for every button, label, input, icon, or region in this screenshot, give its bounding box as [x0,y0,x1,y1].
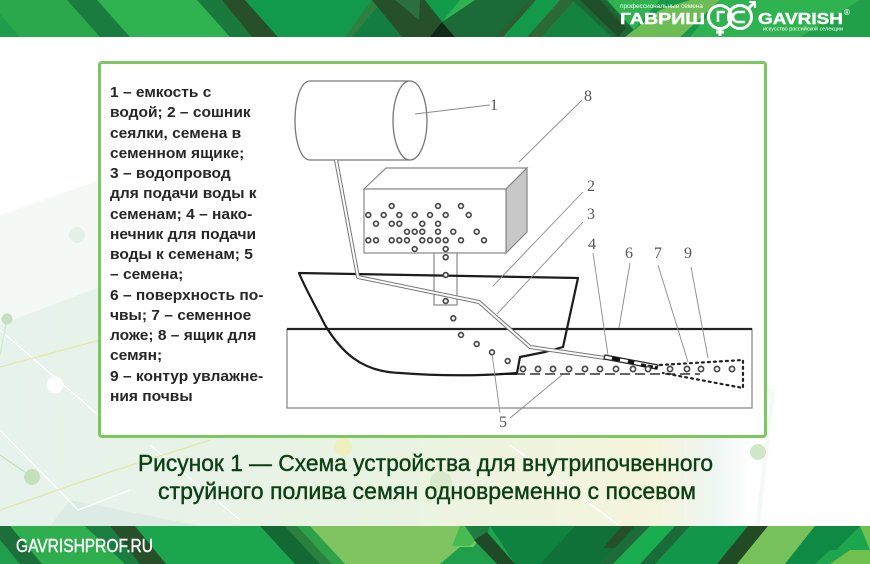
soil block [287,329,752,408]
panel legend text: ния почвы [110,388,193,405]
panel legend text: ложе; 8 – ящик для [110,327,256,344]
panel legend text: семенном ящике; [110,145,244,162]
panel legend text: сеялки, семена в [110,124,241,142]
footer url: GAVRISHPROF.RU [16,536,153,556]
panel legend text: 1 – емкость с [110,84,211,101]
bottom banner [0,526,870,564]
number labels: 6 [625,245,633,262]
panel legend text: нечник для подачи [110,226,256,243]
panel legend text: 6 – поверхность по- [110,286,263,304]
panel legend text [110,84,263,405]
number labels: 1 [490,97,498,114]
panel legend text: для подачи воды к [110,185,257,202]
coulter hull [299,273,578,375]
number labels: 4 [588,236,596,253]
panel legend text: семян; [110,347,162,364]
panel: diagram frame [98,61,767,438]
seed box [364,168,527,305]
panel legend text: семенам; 4 – нако- [110,206,252,222]
number labels: 9 [684,245,692,262]
seeds on bed [520,366,735,372]
number labels: 2 [587,178,595,195]
logo emblem [708,2,755,36]
panel legend text: чвы; 7 – семенное [110,307,251,324]
logo tagline: профессиональные семена [620,3,703,10]
leader lines [415,100,708,418]
seed bed [500,373,700,375]
panel legend text: – семена; [110,266,183,283]
top banner [0,0,870,37]
logo [620,1,850,36]
number labels: 5 [499,414,507,431]
panel legend text: воды к семенам; 5 [110,246,253,263]
panel legend text: водой; 2 – сошник [110,104,251,121]
seeds in box [366,204,486,251]
falling seeds [443,255,510,363]
moisture contour [660,360,743,388]
number labels: 3 [587,206,595,223]
logo wordmark latin: GAVRISH [758,11,843,28]
number labels: 8 [584,88,592,105]
caption line 1: Рисунок 1 — Схема устройства для внутрипочвенного [138,450,713,476]
panel legend text: 9 – контур увлажне- [110,368,263,384]
registered mark: ® [844,8,850,17]
number labels [490,88,692,431]
logo slogan: искусство российской селекции [763,26,843,32]
water tank [295,81,427,160]
water pipe [336,160,605,358]
caption line 2: струйного полива семян одновременно с посевом [158,478,696,504]
nozzle [604,355,658,369]
panel legend text: 3 – водопровод [110,165,231,182]
number labels: 7 [654,245,662,262]
logo wordmark cyrillic: ГАВРИШ [620,11,705,28]
